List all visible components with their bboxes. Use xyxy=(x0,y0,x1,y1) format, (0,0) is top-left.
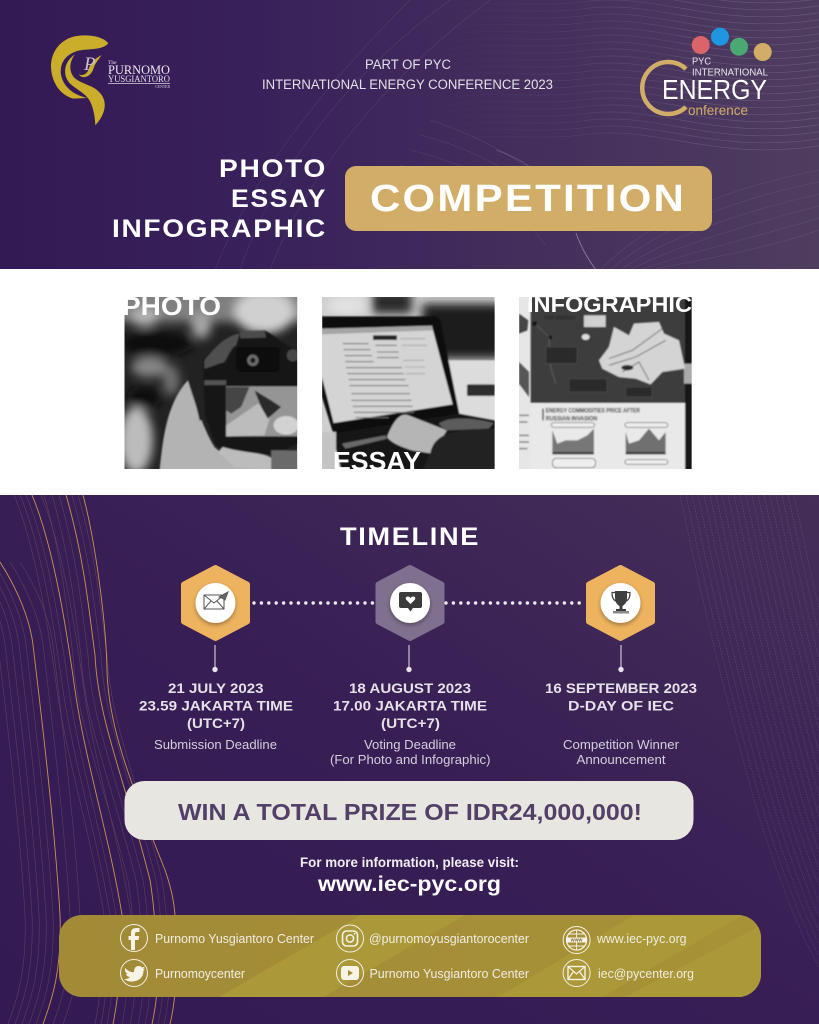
logo: PYC International Energy Conference xyxy=(642,28,772,118)
website: WWW xyxy=(571,938,583,943)
twitter: Purnomoycenter xyxy=(155,966,246,981)
step 2: voting deadline: Voting Deadline xyxy=(364,738,456,752)
facebook: Purnomo Yusgiantoro Center xyxy=(155,931,315,946)
social contact band xyxy=(59,915,761,997)
lower panel xyxy=(0,495,819,1024)
heading: categories: ESSAY xyxy=(231,185,327,213)
heading: categories xyxy=(112,155,327,243)
conference label xyxy=(262,57,553,92)
step 1: submission deadline: Submission Deadline xyxy=(154,738,277,752)
heading badge: competition: COMPETITION xyxy=(370,178,686,220)
heading: categories: PHOTO xyxy=(219,155,327,183)
more information text: www.iec-pyc.org xyxy=(317,872,501,896)
logo: PYC International Energy Conference: INTERNATIONAL xyxy=(692,66,768,78)
conference label: INTERNATIONAL ENERGY CONFERENCE 2023 xyxy=(262,77,553,92)
photo section xyxy=(0,269,819,469)
step 3: winner announcement xyxy=(545,568,698,767)
icon: envelope with paper plane xyxy=(204,592,228,609)
icon: chat bubble with heart xyxy=(399,592,422,612)
heading: categories: INFOGRAPHIC xyxy=(112,215,327,243)
step 2: voting deadline xyxy=(330,568,490,767)
step 1: submission deadline: 21 JULY 2023 xyxy=(168,681,264,696)
website xyxy=(563,926,686,954)
step 3: winner announcement: Announcement xyxy=(576,753,666,767)
website: www.iec-pyc.org xyxy=(596,931,686,946)
step 1: submission deadline: 23.59 JAKARTA TIME xyxy=(139,698,293,714)
photo: infographic poster: RUSSIAN INVASION xyxy=(546,416,597,423)
logo: Purnomo Yusgiantoro Center xyxy=(51,35,170,125)
instagram xyxy=(336,925,530,952)
twitter xyxy=(120,960,246,986)
youtube xyxy=(336,960,530,986)
photo: camera xyxy=(124,297,298,469)
header panel xyxy=(0,0,819,270)
heading badge: competition xyxy=(345,166,712,231)
photo: infographic poster: ENERGY COMMODITIES PRICE AFTER xyxy=(546,407,640,414)
prize banner: WIN A TOTAL PRIZE OF IDR24,000,000! xyxy=(178,799,642,825)
heading: timeline: TIMELINE xyxy=(340,523,480,551)
timeline connector dots xyxy=(254,601,585,605)
photo: infographic poster xyxy=(519,292,693,471)
email xyxy=(563,960,694,986)
step 2: voting deadline: 17.00 JAKARTA TIME xyxy=(333,698,487,714)
photo: laptop essay xyxy=(322,297,495,469)
conference label: PART OF PYC xyxy=(365,57,451,72)
email: iec@pycenter.org xyxy=(598,966,694,981)
logo: Purnomo Yusgiantoro Center: P xyxy=(83,54,96,75)
label: photo: PHOTO xyxy=(122,293,221,321)
step 2: voting deadline: 18 AUGUST 2023 xyxy=(349,681,472,696)
step 1: submission deadline: (UTC+7) xyxy=(187,716,245,731)
photo: infographic poster: FOR ENERGY xyxy=(544,316,576,322)
logo: Purnomo Yusgiantoro Center: The xyxy=(108,60,117,66)
logo: PYC International Energy Conference: onference xyxy=(688,103,748,118)
label: essay: ESSAY xyxy=(333,446,421,476)
more information text: For more information, please visit: xyxy=(300,854,519,870)
logo: Purnomo Yusgiantoro Center: YUSGIANTORO xyxy=(108,75,170,85)
step 3: winner announcement: 16 SEPTEMBER 2023 xyxy=(545,681,698,696)
step 3: winner announcement: Competition Winner xyxy=(563,738,679,752)
logo: PYC International Energy Conference: ENERGY xyxy=(662,74,767,105)
logo: PYC International Energy Conference: PYC xyxy=(692,56,711,68)
facebook xyxy=(120,924,315,952)
step 2: voting deadline: (For Photo and Infographic) xyxy=(330,753,490,767)
icon: trophy xyxy=(612,591,630,614)
prize banner xyxy=(124,781,694,840)
step 3: winner announcement: D-DAY OF IEC xyxy=(568,698,674,714)
step 2: voting deadline: (UTC+7) xyxy=(381,716,440,731)
step 1: submission deadline xyxy=(139,568,293,752)
logo: Purnomo Yusgiantoro Center: CENTER xyxy=(155,85,170,89)
label: infographic: INFOGRAPHIC xyxy=(527,292,692,317)
youtube: Purnomo Yusgiantoro Center xyxy=(370,966,530,981)
more information text xyxy=(300,854,519,896)
logo: Purnomo Yusgiantoro Center: PURNOMO xyxy=(108,63,170,77)
instagram: @purnomoyusgiantorocenter xyxy=(369,931,530,946)
